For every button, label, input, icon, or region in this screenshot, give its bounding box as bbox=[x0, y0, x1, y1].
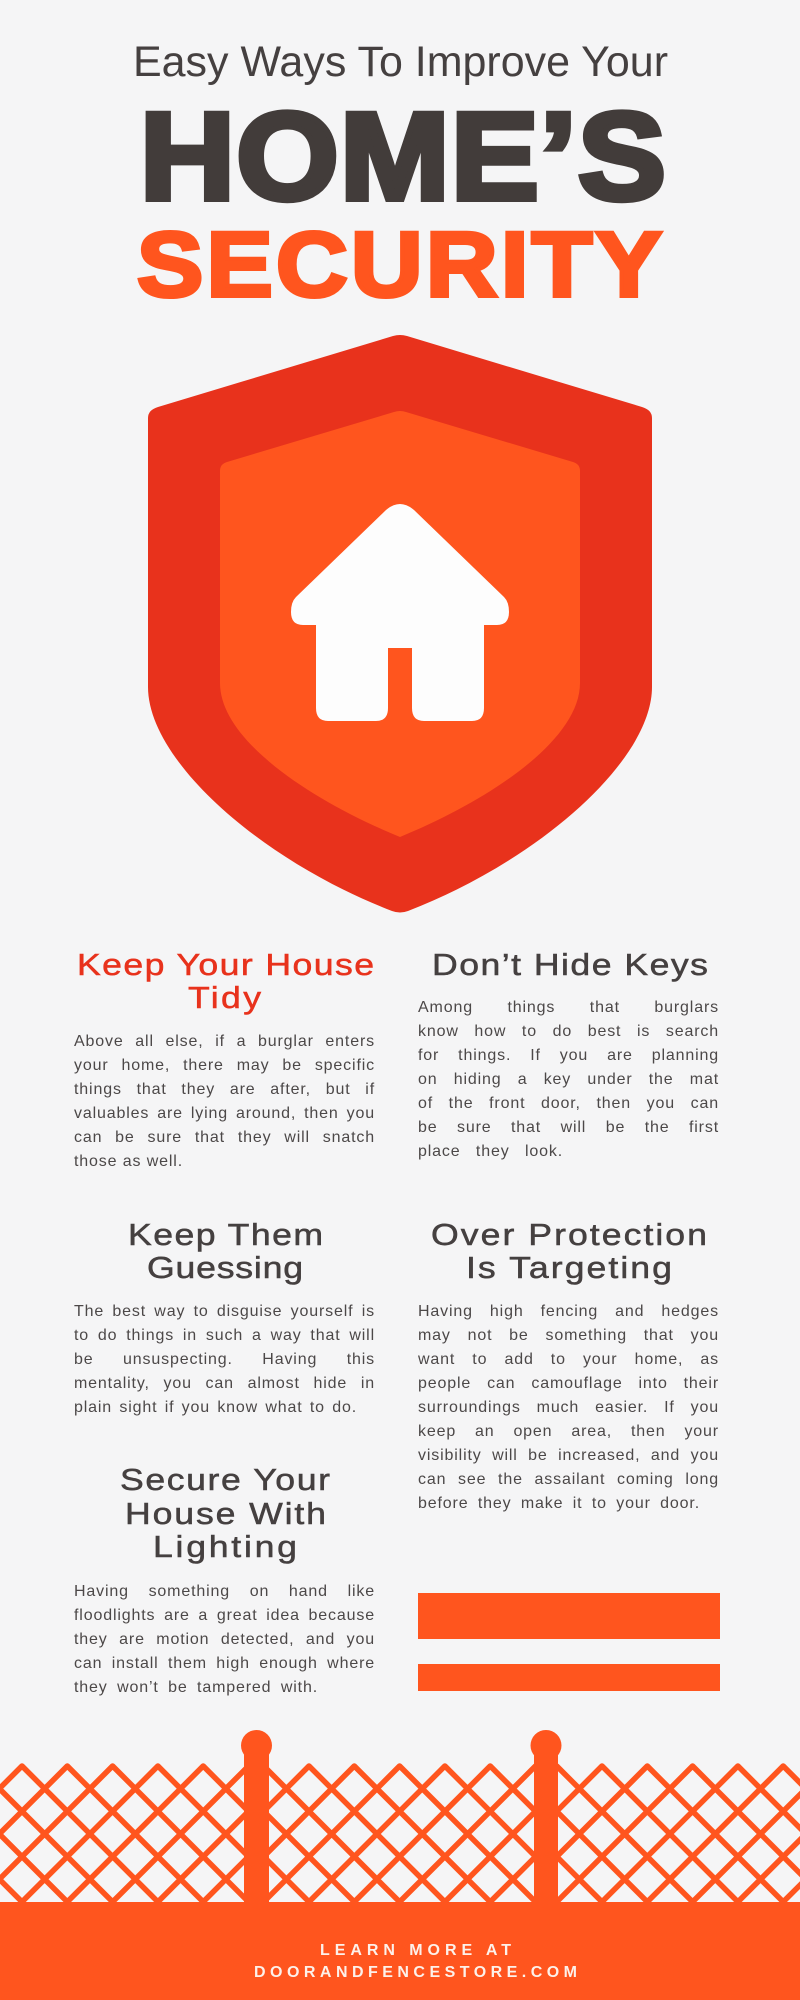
heading: Keep Your House Tidy: Keep Your House bbox=[77, 948, 374, 982]
text block: Keep Your House Tidy: your home, there may be specific bbox=[74, 1056, 375, 1074]
fence post right bbox=[530, 1730, 562, 1905]
text block: Over Protection Is Targeting: visibility will be increased, and you bbox=[418, 1446, 719, 1464]
text block: Keep Them Guessing: mentality, you can almost hide in bbox=[74, 1374, 375, 1392]
text block: Over Protection Is Targeting: keep an open area, then your bbox=[418, 1422, 719, 1440]
title line: SECURITY: SECURITY bbox=[137, 213, 662, 316]
heading: Don't Hide Keys: Don’t Hide Keys bbox=[432, 948, 708, 982]
text block: Don't Hide Keys: be sure that will be the first bbox=[418, 1118, 719, 1136]
icon: house bbox=[291, 504, 509, 721]
footer band bbox=[0, 1902, 800, 2000]
heading: Secure Your House With Lighting: Secure Your bbox=[120, 1463, 330, 1497]
text block: Keep Your House Tidy bbox=[74, 1032, 375, 1170]
heading: Secure Your House With Lighting bbox=[120, 1463, 330, 1564]
footer text: DOORANDFENCESTORE.COM bbox=[254, 1964, 577, 1981]
heading: Over Protection Is Targeting: Over Protection bbox=[431, 1218, 707, 1252]
text block: Keep Your House Tidy: can be sure that they will snatch bbox=[74, 1128, 375, 1146]
text block: Keep Them Guessing: to do things in such a way that will bbox=[74, 1326, 375, 1344]
text block: Keep Them Guessing bbox=[74, 1302, 375, 1416]
orange bars bbox=[418, 1593, 720, 1691]
text block: Over Protection Is Targeting: Having high fencing and hedges bbox=[418, 1302, 719, 1320]
text block: Don't Hide Keys: for things. If you are planning bbox=[418, 1046, 719, 1064]
text block: Don't Hide Keys: of the front door, then you can bbox=[418, 1094, 719, 1112]
text block: Keep Them Guessing: plain sight if you know what to do. bbox=[74, 1398, 357, 1416]
fence post left bbox=[241, 1730, 272, 1905]
title line: Easy Ways To Improve Your: Easy Ways To Improve Your bbox=[133, 38, 668, 86]
text block: Over Protection Is Targeting: can see the assailant coming long bbox=[418, 1470, 719, 1488]
text block: Keep Your House Tidy: valuables are lying around, then you bbox=[74, 1104, 375, 1122]
heading: Keep Them Guessing: Guessing bbox=[147, 1251, 303, 1285]
icon: shield with house bbox=[148, 335, 652, 912]
fence illustration bbox=[0, 1730, 800, 1902]
footer text bbox=[254, 1942, 577, 1981]
text block: Over Protection Is Targeting: people can camouflage into their bbox=[418, 1374, 719, 1392]
footer text: LEARN MORE AT bbox=[320, 1942, 511, 1959]
heading: Over Protection Is Targeting: Is Targeting bbox=[466, 1251, 672, 1285]
shield outer bbox=[148, 335, 652, 912]
text block: Keep Your House Tidy: Above all else, if a burglar enters bbox=[74, 1032, 375, 1050]
text block: Over Protection Is Targeting: want to add to your home, as bbox=[418, 1350, 719, 1368]
panel: Keep Your House Tidy bbox=[74, 948, 375, 1170]
text block: Don't Hide Keys: know how to do best is search bbox=[418, 1022, 719, 1040]
text block: Over Protection Is Targeting: surroundings much easier. If you bbox=[418, 1398, 719, 1416]
heading: Keep Them Guessing: Keep Them bbox=[128, 1218, 323, 1252]
text block: Over Protection Is Targeting: may not be something that you bbox=[418, 1326, 719, 1344]
heading: Keep Your House Tidy: Tidy bbox=[188, 981, 261, 1015]
text block: Over Protection Is Targeting bbox=[418, 1302, 719, 1512]
panel: Secure Your House With Lighting bbox=[74, 1463, 375, 1696]
panel: Keep Them Guessing bbox=[74, 1218, 375, 1416]
text block: Secure Your House With Lighting: can install them high enough where bbox=[74, 1654, 375, 1672]
text block: Keep Your House Tidy: those as well. bbox=[74, 1152, 183, 1170]
lattice panel middle bbox=[269, 1763, 534, 1902]
text block: Don't Hide Keys bbox=[418, 998, 719, 1160]
heading: Secure Your House With Lighting: Lighting bbox=[153, 1530, 297, 1564]
shield inner bbox=[220, 411, 580, 837]
heading: Secure Your House With Lighting: House With bbox=[125, 1497, 326, 1531]
heading: Keep Them Guessing bbox=[128, 1218, 323, 1285]
lattice panel right bbox=[558, 1763, 800, 1902]
text block: Over Protection Is Targeting: before they make it to your door. bbox=[418, 1494, 700, 1512]
lattice panel left bbox=[0, 1763, 244, 1902]
text block: Don't Hide Keys: place they look. bbox=[418, 1142, 563, 1160]
panel: Don't Hide Keys bbox=[418, 948, 719, 1160]
text block: Secure Your House With Lighting: floodlights are a great idea because bbox=[74, 1606, 375, 1624]
text block: Secure Your House With Lighting: they are motion detected, and you bbox=[74, 1630, 375, 1648]
text block: Keep Your House Tidy: things that they are after, but if bbox=[74, 1080, 375, 1098]
heading: Keep Your House Tidy bbox=[77, 948, 374, 1015]
text block: Secure Your House With Lighting: they won’t be tampered with. bbox=[74, 1678, 318, 1696]
text block: Don't Hide Keys: Among things that burglars bbox=[418, 998, 719, 1016]
heading: Over Protection Is Targeting bbox=[431, 1218, 707, 1285]
panel: Over Protection Is Targeting bbox=[418, 1218, 719, 1512]
title bbox=[133, 38, 668, 316]
text block: Don't Hide Keys: on hiding a key under the mat bbox=[418, 1070, 719, 1088]
text block: Keep Them Guessing: be unsuspecting. Having this bbox=[74, 1350, 375, 1368]
text block: Keep Them Guessing: The best way to disguise yourself is bbox=[74, 1302, 375, 1320]
text block: Secure Your House With Lighting: Having something on hand like bbox=[74, 1582, 375, 1600]
text block: Secure Your House With Lighting bbox=[74, 1582, 375, 1696]
title line: HOME'S: HOME’S bbox=[140, 87, 666, 226]
